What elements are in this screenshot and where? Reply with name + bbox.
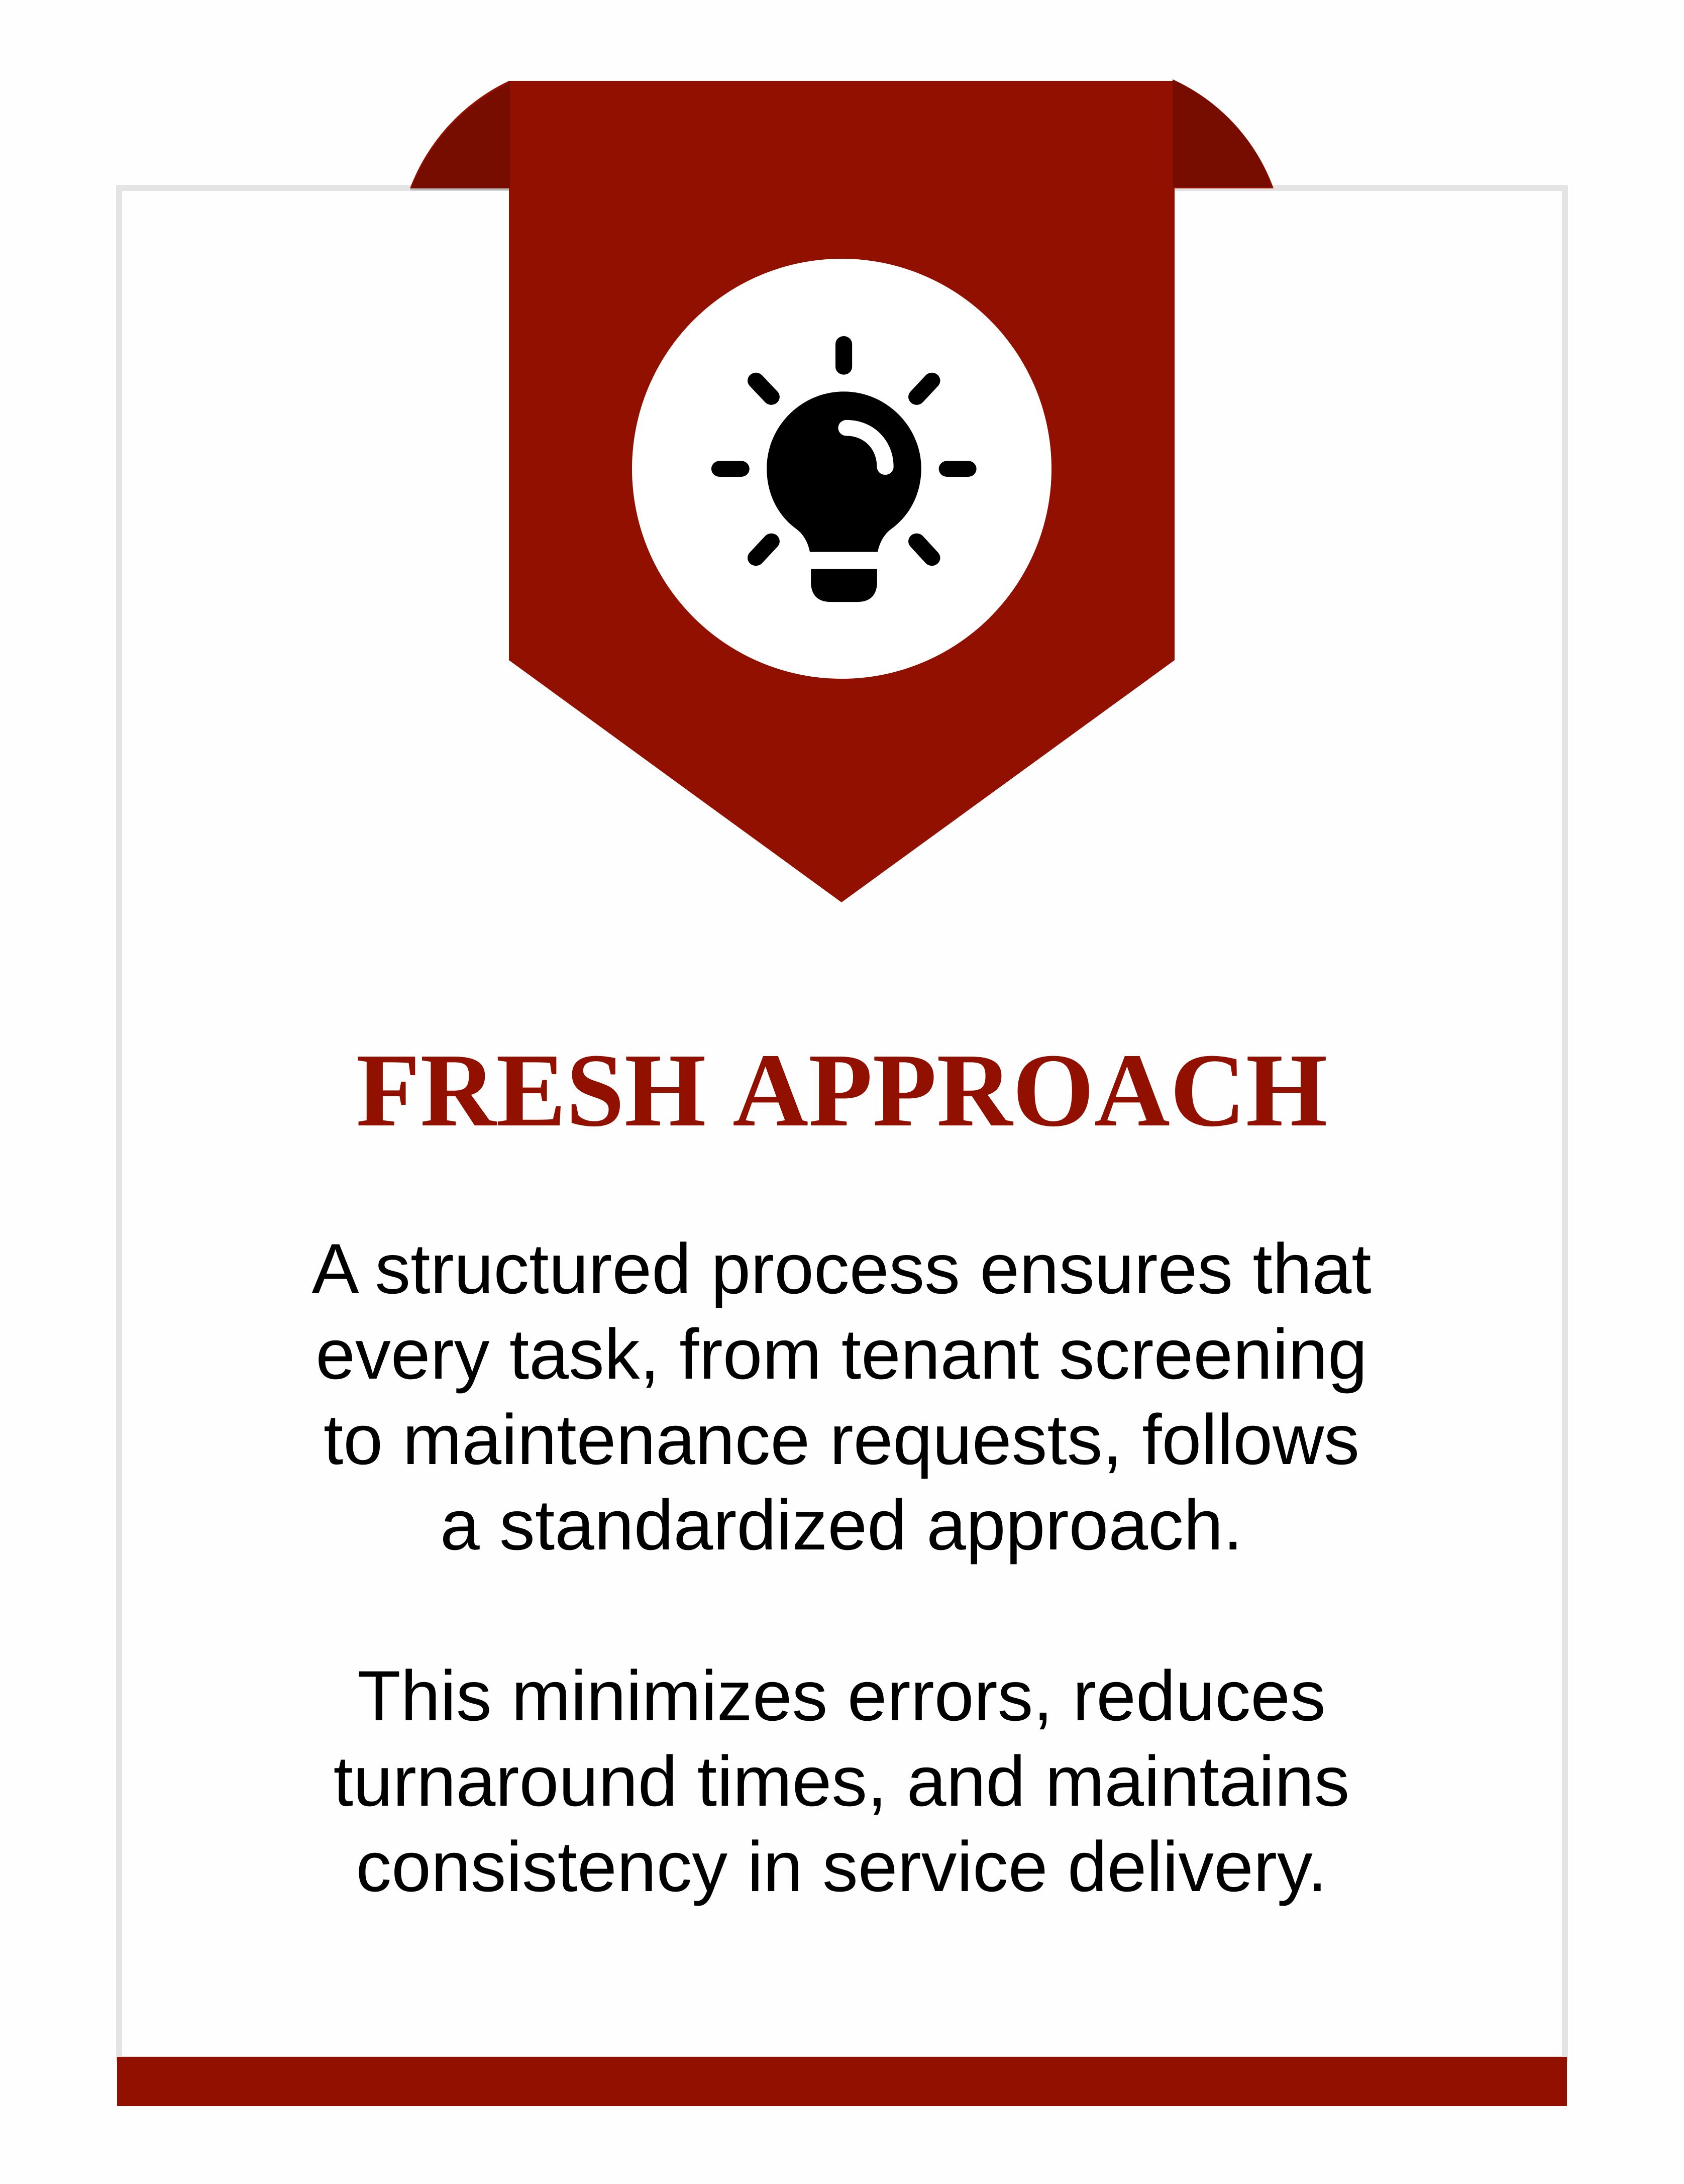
body text: first paragraph: a standardized approach.	[440, 1486, 1243, 1565]
white icon circle	[632, 259, 1051, 679]
body text: second paragraph: consistency in service delivery.	[356, 1827, 1327, 1907]
body text: first paragraph: A structured process ensures that	[311, 1229, 1372, 1309]
ribbon body	[509, 81, 1175, 902]
ribbon fold: right	[1173, 79, 1274, 188]
ribbon fold: left	[410, 81, 510, 190]
icon: light bulb	[719, 344, 968, 602]
ribbon banner	[410, 79, 1274, 902]
title: FRESH APPROACH	[356, 1032, 1327, 1149]
body text: first paragraph: every task, from tenant screening	[315, 1315, 1367, 1394]
body text: second paragraph: This minimizes errors, reduces	[357, 1656, 1326, 1736]
footer bar	[117, 2057, 1567, 2106]
body text: second paragraph: turnaround times, and maintains	[334, 1742, 1349, 1821]
body text: first paragraph	[311, 1229, 1372, 1565]
body text: second paragraph	[334, 1656, 1349, 1907]
panel: card with grey border and red footer bar	[116, 185, 1568, 2106]
body text: first paragraph: to maintenance requests, follows	[324, 1400, 1359, 1480]
